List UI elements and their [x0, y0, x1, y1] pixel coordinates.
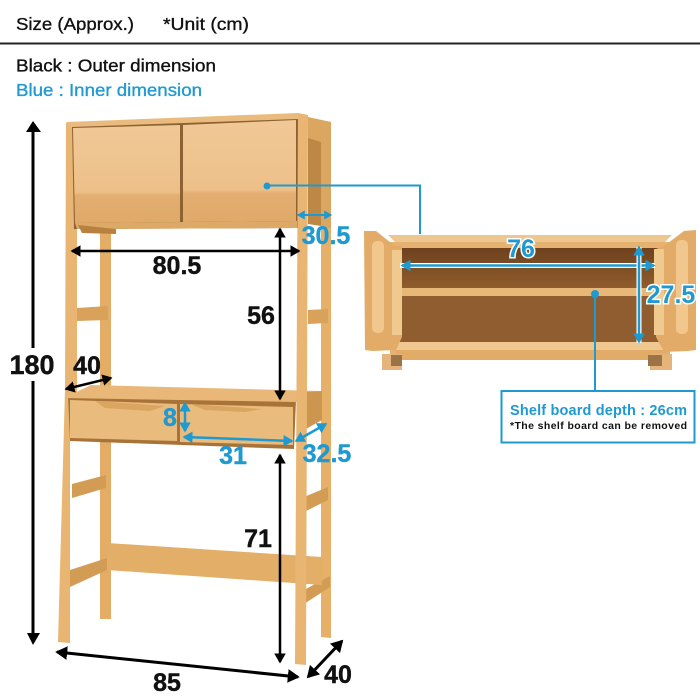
side frame upper — [308, 117, 331, 228]
back left post — [100, 232, 111, 619]
header: size and unit: Size (Approx.) — [16, 14, 134, 34]
desk top — [64, 385, 320, 402]
bottom boards — [396, 342, 668, 350]
lower side rails — [72, 475, 106, 498]
left door — [73, 125, 180, 223]
header: size and unit: *Unit (cm) — [163, 14, 249, 34]
right drawer — [180, 404, 293, 445]
dimension: width 80.5: 80.5 — [153, 252, 201, 280]
right door open — [656, 230, 696, 352]
legend: outer and inner dimension — [16, 56, 216, 100]
front right post — [295, 113, 308, 665]
drawer finger pulls — [95, 401, 165, 411]
dimension: drawer height 8 — [163, 403, 185, 432]
cabinet frame — [390, 242, 670, 354]
dimension: depth 40 lower: 40 — [324, 661, 352, 689]
dimension: drawer width 31 — [184, 437, 292, 470]
right door — [183, 120, 296, 222]
shelf board — [400, 288, 662, 296]
callout: shelf board depth: Shelf board depth : 26cm — [510, 403, 687, 419]
left door open — [364, 231, 402, 351]
dimension: depth 40 lower — [308, 641, 352, 689]
furniture: shelf desk — [58, 113, 331, 665]
dimension: drawer depth 32.5 — [296, 424, 351, 468]
dimension: inner height 27.5 — [639, 247, 695, 343]
dimension: height 180: 180 — [9, 350, 55, 380]
legend: outer and inner dimension: Black : Outer dimension — [16, 56, 216, 76]
header: size and unit — [16, 14, 249, 34]
dimension: inner height 27.5: 27.5 — [647, 281, 695, 309]
dimension: inner depth 30.5: 30.5 — [302, 222, 350, 250]
detail: open cabinet — [364, 230, 696, 370]
lower back panel — [400, 296, 662, 342]
dimension: depth 40 upper: 40 — [73, 352, 101, 380]
cabinet body — [72, 119, 298, 229]
back right post — [321, 121, 331, 638]
dimension: inner width 76: 76 — [507, 235, 535, 263]
front left leg — [58, 123, 77, 643]
dimension: clearance 56: 56 — [247, 302, 275, 330]
legend: outer and inner dimension: Blue : Inner dimension — [16, 80, 202, 100]
callout: shelf board depth — [502, 290, 694, 442]
dimension: width 85: 85 — [153, 669, 181, 697]
cabinet feet — [382, 354, 402, 370]
connector line from cabinet to detail — [264, 182, 420, 234]
upper side rails — [77, 306, 108, 321]
cabinet top board — [388, 235, 672, 243]
left drawer — [70, 400, 177, 441]
desk backing — [68, 396, 296, 449]
dimension: height 180 — [9, 121, 55, 645]
cabinet top — [66, 113, 298, 128]
lower shelf board — [107, 543, 322, 585]
dimension: drawer depth 32.5: 32.5 — [303, 440, 351, 468]
cabinet support block — [78, 225, 116, 234]
dimension: drawer width 31: 31 — [219, 442, 247, 470]
upper back panel — [398, 248, 664, 288]
callout: shelf board depth: *The shelf board can be removed — [510, 420, 687, 432]
dimension: depth 40 upper — [66, 352, 111, 389]
dimension: width 85 — [57, 652, 298, 697]
dimension: drawer height 8: 8 — [163, 404, 177, 432]
dimension: clearance 71: 71 — [244, 525, 272, 553]
cabinet bottom rail — [75, 221, 297, 229]
